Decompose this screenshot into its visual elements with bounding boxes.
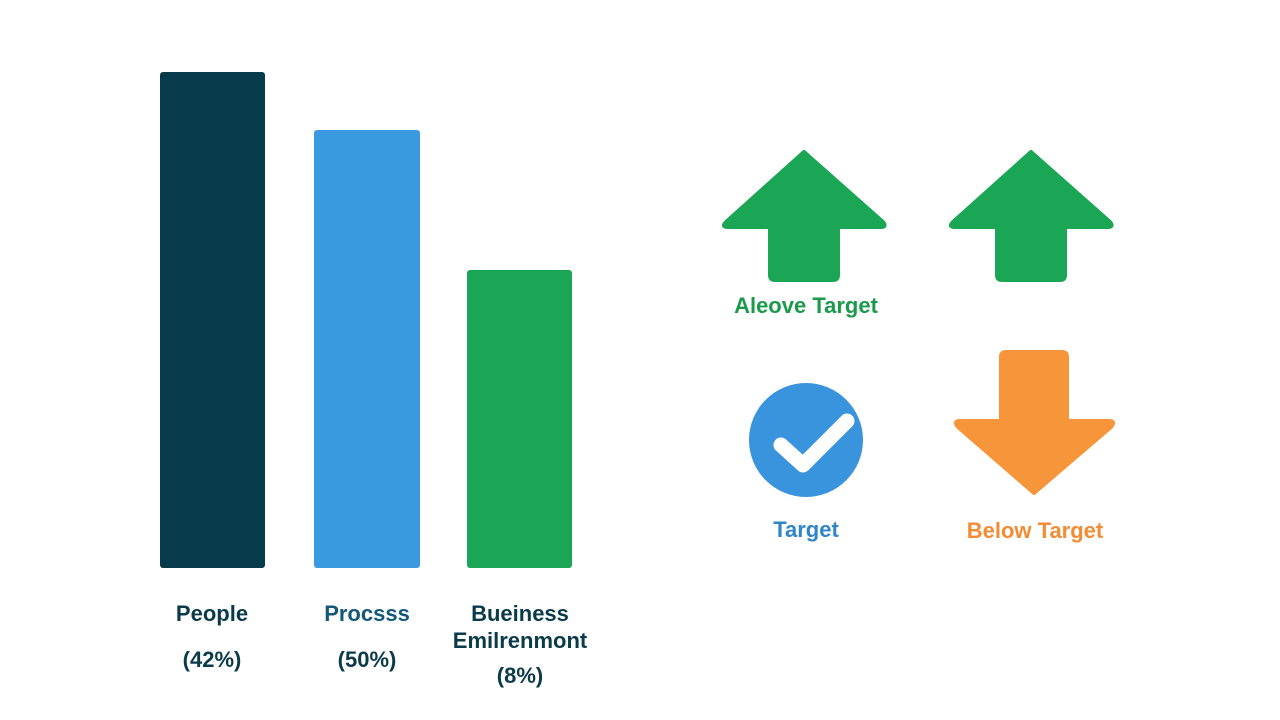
label: Process (324, 601, 410, 672)
label: Process: Procsss (324, 601, 410, 626)
bar chart (160, 72, 587, 688)
label: target: Target (773, 517, 839, 542)
label: People (176, 601, 248, 672)
bar: Business Environment (467, 270, 572, 568)
label: Business Environment: Emilrenmont (453, 628, 587, 653)
label: Business Environment: (8%) (497, 663, 543, 688)
bar: People (160, 72, 265, 568)
label: Business Environment: Bueiness (471, 601, 569, 626)
icon: down arrow (956, 352, 1113, 493)
label: People: People (176, 601, 248, 626)
legend icons (722, 150, 1116, 543)
icon: check circle (749, 383, 863, 497)
icon: up arrow 1 (724, 152, 885, 280)
label: below target: Below Target (967, 518, 1103, 543)
label: People: (42%) (183, 647, 241, 672)
label: Process: (50%) (338, 647, 396, 672)
bar: Process (314, 130, 420, 568)
label: above target: Aleove Target (734, 293, 878, 318)
icon: up arrow 2 (951, 152, 1112, 280)
label: Business Environment (453, 601, 587, 688)
